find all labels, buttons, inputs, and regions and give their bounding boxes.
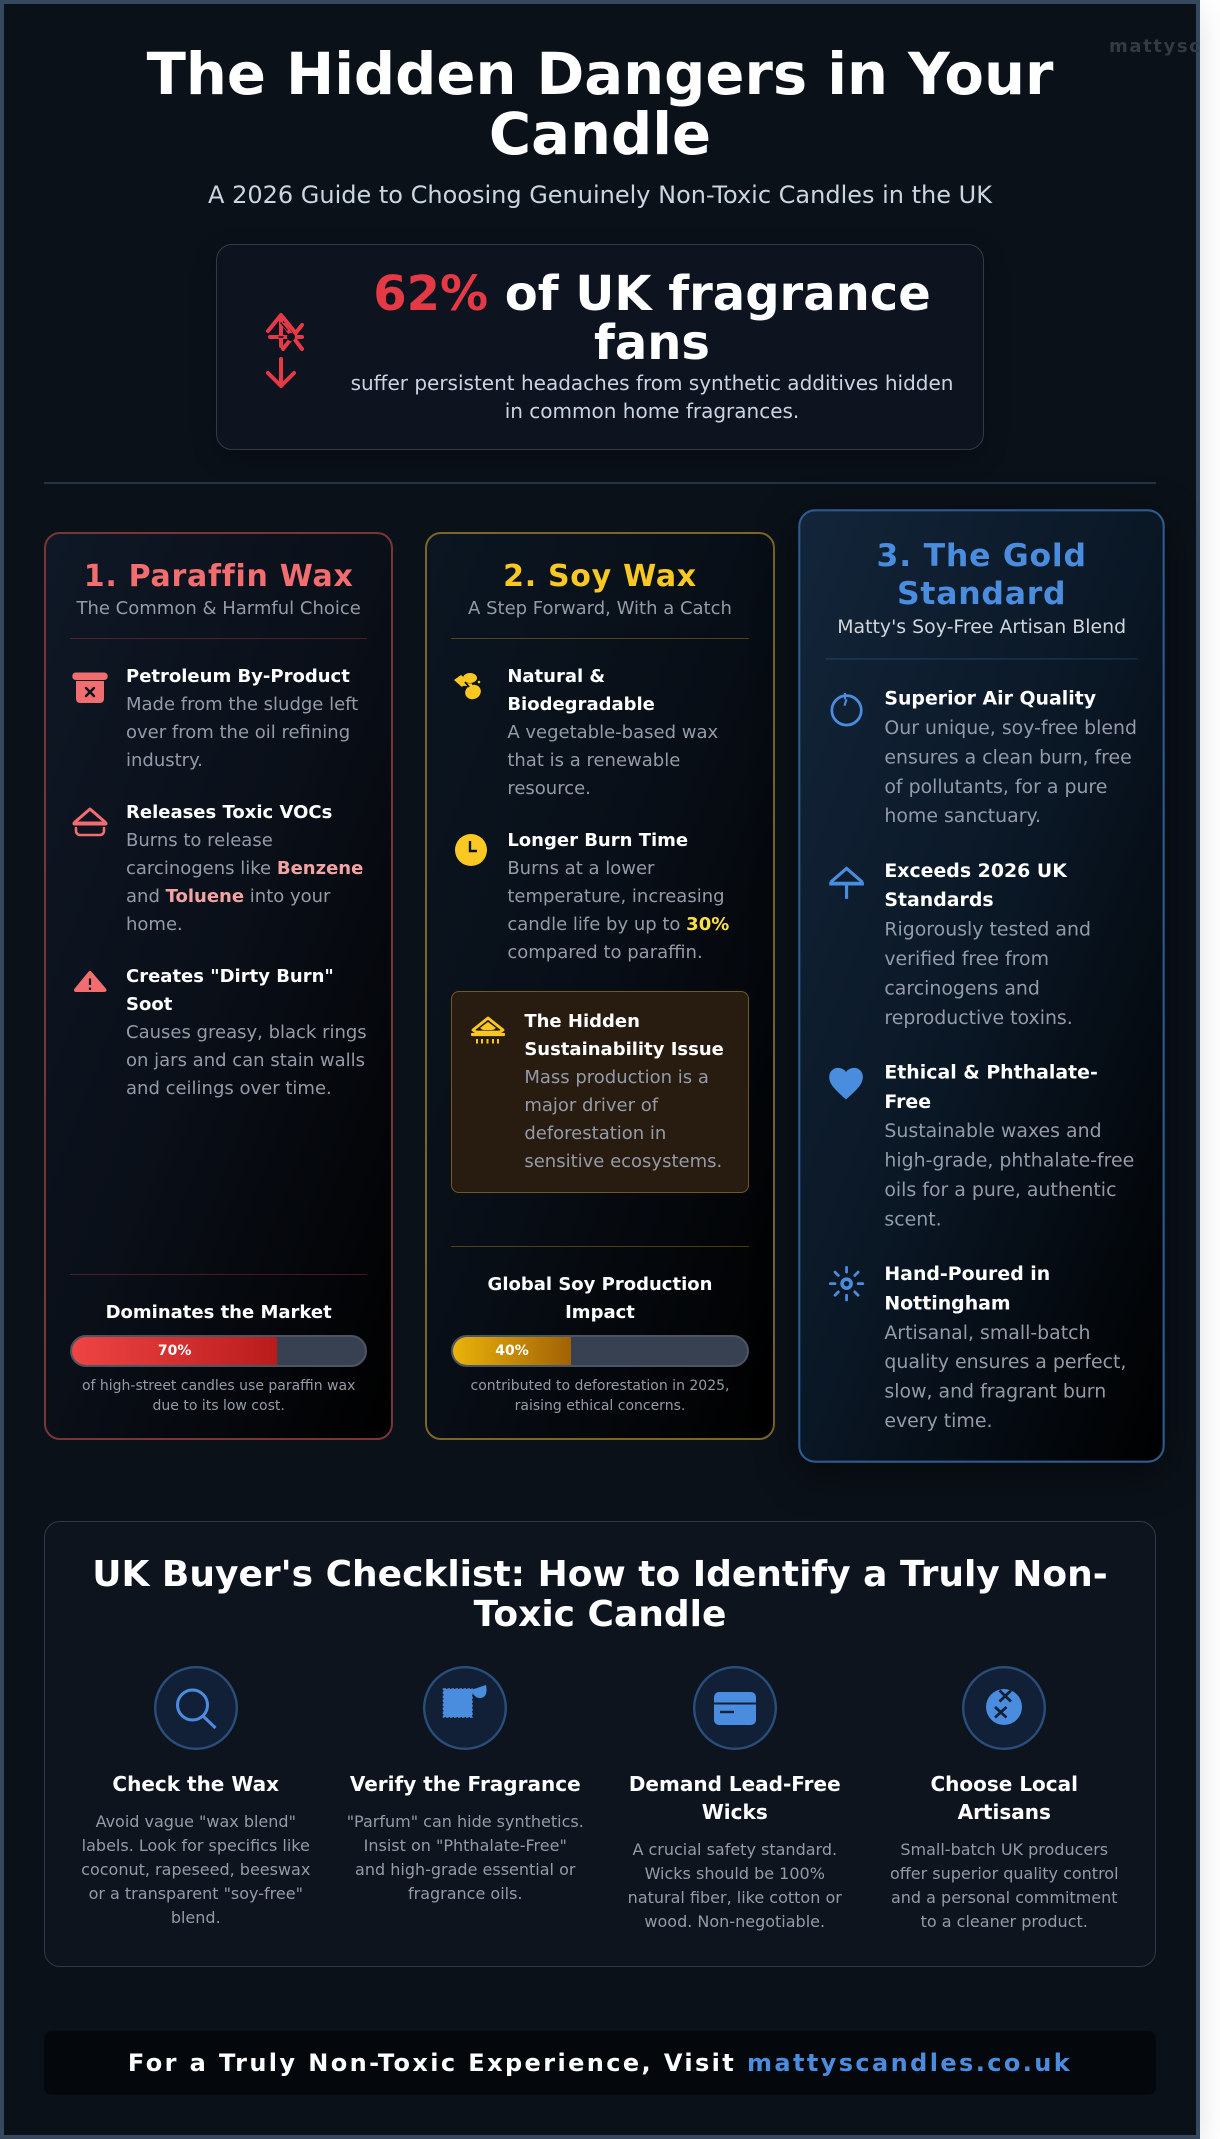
statistic description: suffer persistent headaches from synthetic additives hidden in common home fragrances. bbox=[351, 371, 953, 423]
statistic caption: contributed to deforestation in 2025, raising ethical concerns. bbox=[471, 1378, 729, 1414]
item: air quality bbox=[830, 688, 1137, 827]
checklist item text: Avoid vague "wax blend" labels. Look for specifics like coconut, rapeseed, beeswax or a transparent "soy-free" blend. bbox=[81, 1812, 310, 1927]
item text: A vegetable-based wax that is a renewable resource. bbox=[507, 722, 718, 799]
icon: crossed ball bbox=[962, 1666, 1046, 1750]
icon: warning arrows bbox=[266, 312, 304, 388]
item text: Creates "Dirty Burn" Soot bbox=[126, 966, 334, 1015]
item text: Made from the sludge left over from the oil refining industry. bbox=[126, 694, 358, 771]
icon: warning triangle bbox=[74, 970, 107, 992]
card heading: Matty's Soy-Free Artisan Blend bbox=[837, 616, 1126, 638]
checklist item heading: Check the Wax bbox=[112, 1772, 279, 1796]
item: ethical bbox=[829, 1062, 1134, 1231]
item text: Ethical & Phthalate-Free bbox=[884, 1062, 1097, 1113]
checklist: check the wax bbox=[81, 1666, 310, 1927]
card heading: A Step Forward, With a Catch bbox=[468, 598, 732, 619]
market share statistic bbox=[70, 1274, 367, 1416]
item: natural bbox=[454, 666, 718, 799]
panel: buyer's checklist bbox=[44, 1521, 1156, 1967]
item text: Longer Burn Time bbox=[507, 830, 688, 851]
icon: archive box bbox=[72, 672, 108, 703]
item text bbox=[507, 666, 718, 799]
statistic heading: Global Soy Production Impact bbox=[488, 1274, 712, 1323]
progress bar 40%: 40% bbox=[495, 1343, 529, 1359]
item text bbox=[884, 1062, 1134, 1231]
item: standards bbox=[829, 860, 1091, 1029]
item text: Our unique, soy-free blend ensures a clean burn, free of pollutants, for a pure home sanctuary. bbox=[884, 717, 1137, 827]
item text bbox=[884, 1263, 1126, 1432]
card heading bbox=[70, 559, 367, 639]
icon: card bbox=[693, 1666, 777, 1750]
item text bbox=[126, 966, 367, 1099]
item text: Hand-Poured in Nottingham bbox=[884, 1263, 1050, 1315]
item text: Sustainable waxes and high-grade, phthalate-free oils for a pure, authentic scent. bbox=[884, 1120, 1134, 1231]
footer call to action bbox=[44, 2031, 1156, 2095]
card heading: 2. Soy Wax bbox=[503, 559, 697, 594]
footer call to action: For a Truly Non-Toxic Experience, Visit mattyscandles.co.uk bbox=[128, 2049, 1072, 2077]
checklist: local artisans bbox=[890, 1666, 1119, 1931]
callout text bbox=[524, 1011, 724, 1172]
item: soot bbox=[74, 966, 367, 1099]
icon: timer ring bbox=[830, 693, 863, 726]
checklist item text: Small-batch UK producers offer superior quality control and a personal commitment to a cleaner product. bbox=[890, 1840, 1119, 1931]
progress bar 40% bbox=[451, 1335, 749, 1367]
checklist item heading: Demand Lead-Free Wicks bbox=[629, 1772, 841, 1824]
item text: Rigorously tested and verified free from carcinogens and reproductive toxins. bbox=[884, 919, 1091, 1029]
item: VOCs bbox=[72, 802, 363, 935]
panel: gold standard bbox=[798, 509, 1165, 1463]
title: The Hidden Dangers in Your Candle bbox=[147, 41, 1053, 168]
item text: Burns to release carcinogens like Benzene and Toluene into your home. bbox=[126, 830, 363, 935]
panel: headline statistic bbox=[216, 244, 984, 450]
item: petroleum bbox=[72, 666, 358, 771]
item text: Artisanal, small-batch quality ensures a perfect, slow, and fragrant burn every time. bbox=[884, 1322, 1126, 1432]
icon: sun bbox=[828, 1266, 864, 1302]
card heading: 3. The Gold Standard bbox=[876, 538, 1086, 612]
subtitle: A 2026 Guide to Choosing Genuinely Non-Toxic Candles in the UK bbox=[208, 181, 992, 209]
item text: Superior Air Quality bbox=[884, 688, 1096, 710]
callout: sustainability issue bbox=[451, 991, 749, 1193]
card heading: 1. Paraffin Wax bbox=[84, 559, 354, 594]
item: hand-poured bbox=[828, 1263, 1126, 1432]
item text: Exceeds 2026 UK Standards bbox=[884, 860, 1067, 911]
item text bbox=[884, 860, 1091, 1029]
statistic heading: Dominates the Market bbox=[106, 1302, 332, 1323]
item text: Causes greasy, black rings on jars and can stain walls and ceilings over time. bbox=[126, 1022, 367, 1099]
item text: Releases Toxic VOCs bbox=[126, 802, 332, 823]
icon: clock bbox=[455, 834, 487, 866]
checklist item heading: Choose Local Artisans bbox=[930, 1772, 1078, 1824]
panel: paraffin wax bbox=[44, 532, 393, 1440]
icon: roof and rain bbox=[470, 1016, 506, 1044]
icon: vapour tray bbox=[72, 808, 108, 836]
item text: Petroleum By-Product bbox=[126, 666, 350, 687]
item text: Burns at a lower temperature, increasing candle life by up to 30% compared to paraffin. bbox=[507, 858, 729, 963]
callout text: Mass production is a major driver of deforestation in sensitive ecosystems. bbox=[524, 1067, 722, 1172]
statistic: 62% of UK fragrance fans bbox=[373, 266, 931, 371]
card heading bbox=[451, 559, 749, 639]
card heading: The Common & Harmful Choice bbox=[76, 598, 361, 619]
checklist heading: UK Buyer's Checklist: How to Identify a Truly Non-Toxic Candle bbox=[92, 1554, 1108, 1635]
statistic caption: of high-street candles use paraffin wax due to its low cost. bbox=[82, 1378, 355, 1414]
deforestation statistic bbox=[451, 1246, 749, 1416]
checklist: lead-free wicks bbox=[628, 1666, 842, 1931]
checklist item text: "Parfum" can hide synthetics. Insist on "Phthalate-Free" and high-grade essential or fragrance oils. bbox=[347, 1812, 584, 1903]
card heading bbox=[825, 538, 1137, 659]
icon: magnifier bbox=[154, 1666, 238, 1750]
icon: canopy bbox=[829, 866, 864, 899]
checklist item text: A crucial safety standard. Wicks should be 100% natural fiber, like cotton or wood. Non-negotiable. bbox=[628, 1840, 842, 1931]
progress bar 70%: 70% bbox=[158, 1343, 191, 1359]
headline statistic text bbox=[351, 266, 953, 423]
item text: Natural & Biodegradable bbox=[507, 666, 655, 715]
icon: leaf cluster bbox=[454, 673, 481, 700]
panel: soy wax bbox=[425, 532, 775, 1440]
progress bar 70% bbox=[70, 1335, 367, 1367]
checklist: verify the fragrance bbox=[347, 1666, 584, 1903]
icon: stamp and drop bbox=[423, 1666, 507, 1750]
callout text: The Hidden Sustainability Issue bbox=[524, 1011, 724, 1060]
checklist item heading: Verify the Fragrance bbox=[350, 1772, 581, 1796]
icon: heart bbox=[829, 1068, 863, 1100]
item: burn time bbox=[455, 830, 729, 963]
